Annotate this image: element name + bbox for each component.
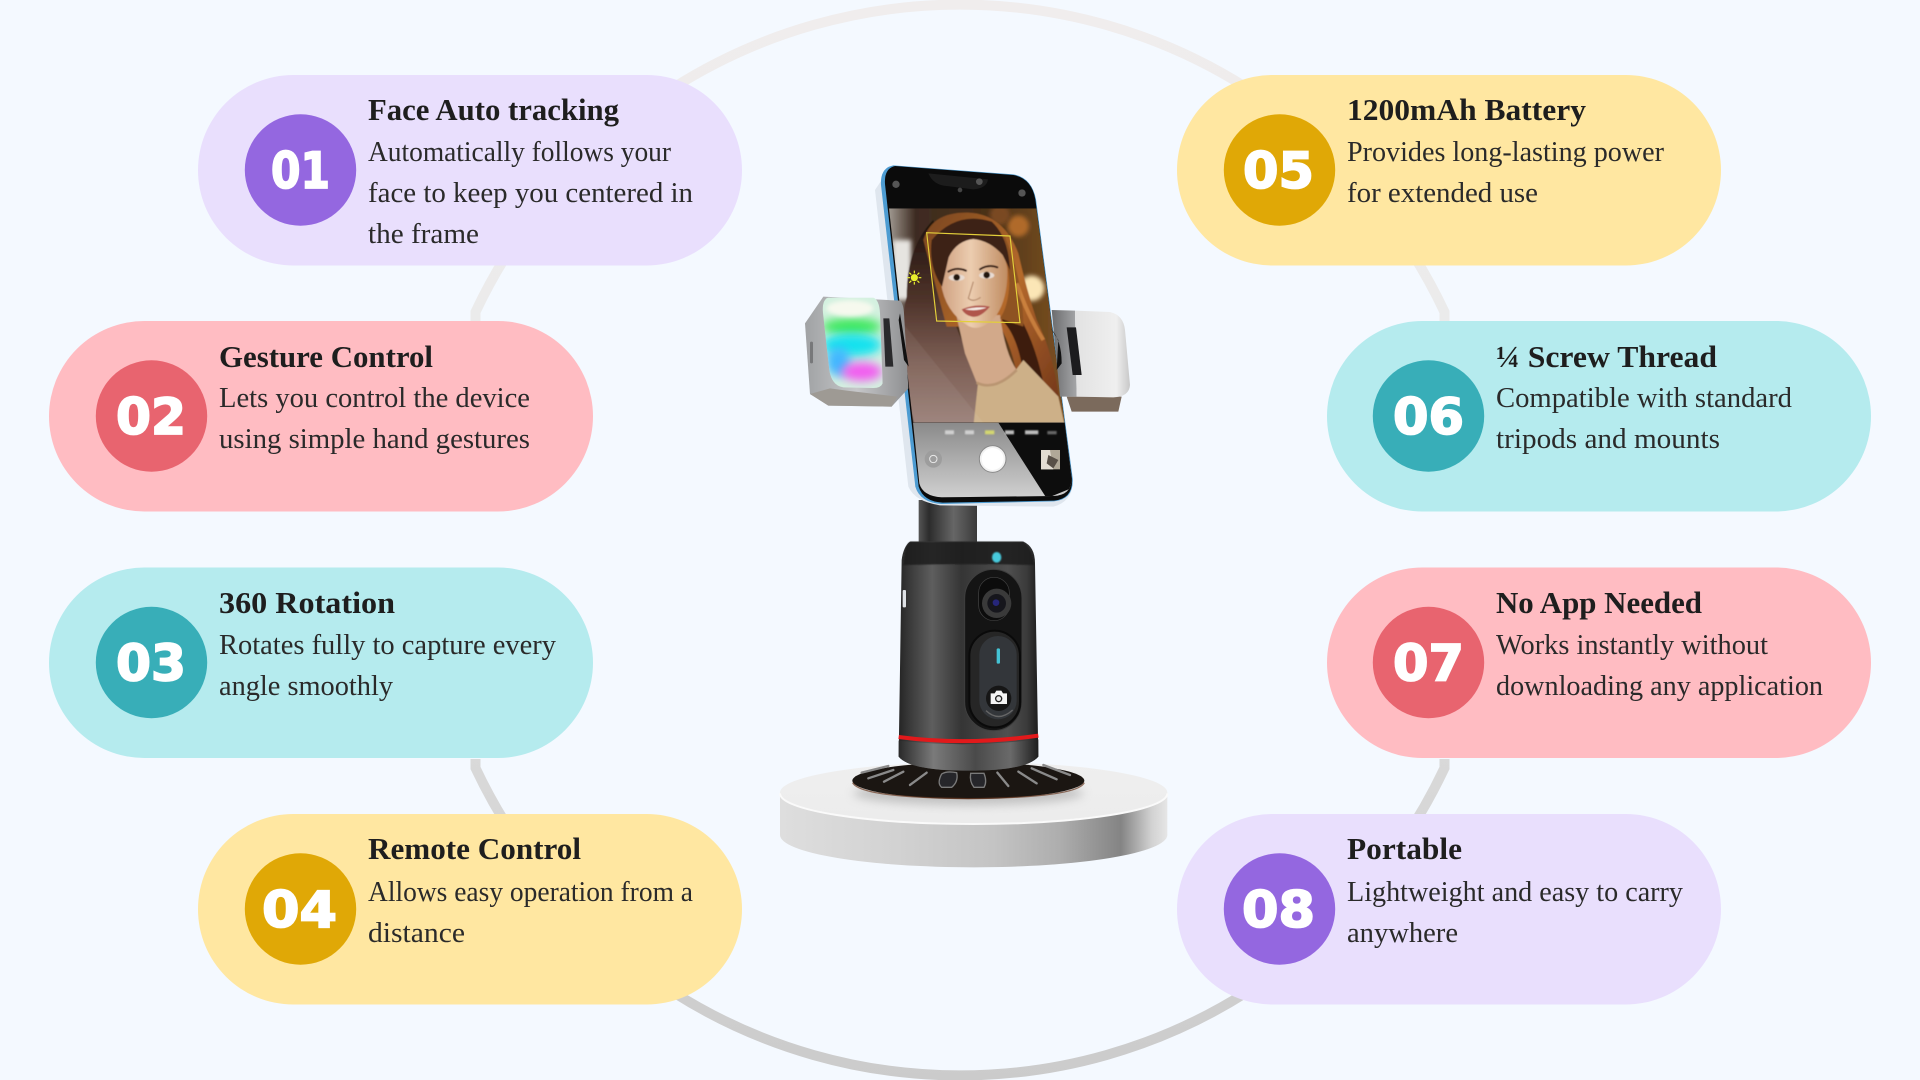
description 01: face to keep you centered in <box>368 177 693 209</box>
right hair highlight <box>1017 283 1043 340</box>
hair framing right <box>1000 236 1024 327</box>
left RGB fill light <box>805 297 909 407</box>
face <box>941 234 1007 328</box>
badge 07 <box>1373 607 1484 718</box>
description 07: downloading any application <box>1496 670 1823 702</box>
badge 04: 04 <box>262 881 337 939</box>
glass reflection <box>905 327 974 422</box>
neckline shadow <box>977 370 1017 385</box>
description 06 <box>1496 382 1792 455</box>
panel: 03 360 Rotation <box>49 568 593 758</box>
badge 03 <box>96 607 207 718</box>
description 03: Rotates fully to capture every <box>219 629 556 661</box>
description 08: Lightweight and easy to carry <box>1347 876 1683 908</box>
description 07: Works instantly without <box>1496 629 1768 661</box>
badge 08 <box>1224 853 1335 965</box>
brows <box>948 266 997 272</box>
gallery thumbnail <box>1041 450 1060 469</box>
description 08 <box>1347 876 1683 949</box>
description 05 <box>1347 136 1664 209</box>
clamp slot <box>883 318 893 367</box>
pill 04 <box>198 814 742 1004</box>
description 04: distance <box>368 917 465 949</box>
pill 08 <box>1177 814 1721 1004</box>
teeth <box>965 307 987 310</box>
description 01 <box>368 136 693 250</box>
badge 03: 03 <box>116 634 186 692</box>
description 06: tripods and mounts <box>1496 423 1720 455</box>
illustration: phone in clamp with lights <box>805 165 1130 507</box>
brightness icon <box>907 271 921 285</box>
USB port <box>810 342 813 363</box>
heading 06: ¼ Screw Thread <box>1496 339 1717 374</box>
description 05: for extended use <box>1347 177 1538 209</box>
panel: 08 Portable <box>1177 814 1721 1004</box>
description 01: the frame <box>368 218 479 250</box>
clamp grip <box>1051 328 1062 370</box>
badge 05: 05 <box>1243 142 1314 200</box>
phone photo: smiling woman <box>887 205 1067 427</box>
description 04 <box>368 876 693 949</box>
badge 05 <box>1224 114 1335 226</box>
description 05: Provides long-lasting power <box>1347 136 1664 168</box>
description 02: Lets you control the device <box>219 382 530 414</box>
clamp slot <box>1067 327 1082 375</box>
description 07 <box>1496 629 1823 702</box>
notch <box>892 173 1026 197</box>
description 01: Automatically follows your <box>368 136 671 168</box>
badge 06 <box>1373 360 1484 472</box>
neck <box>957 315 1017 385</box>
base grip slots <box>862 765 1070 786</box>
pedestal <box>780 762 1167 867</box>
cylinder body <box>899 542 1038 771</box>
forehead hair <box>931 219 1010 287</box>
red ring <box>899 736 1038 741</box>
heading 03: 360 Rotation <box>219 585 395 620</box>
connecting ring: bottom arc <box>476 759 1444 1075</box>
heading 02: Gesture Control <box>219 339 433 374</box>
description 04: Allows easy operation from a <box>368 876 693 908</box>
pill 05 <box>1177 75 1721 266</box>
pill 03 <box>49 568 593 758</box>
stand neck <box>919 500 977 543</box>
camera lens <box>979 577 1011 621</box>
heading 04: Remote Control <box>368 831 581 866</box>
badge 07: 07 <box>1393 634 1464 692</box>
pill 06 <box>1327 321 1871 512</box>
mode labels <box>945 430 1057 434</box>
right hair dark under-layer <box>1002 318 1043 380</box>
connecting ring: top arc <box>476 5 1444 321</box>
heading 05: 1200mAh Battery <box>1347 92 1587 127</box>
camera controls area <box>907 423 1075 498</box>
panel: 02 Gesture Control <box>49 321 593 512</box>
heading 08: Portable <box>1347 831 1462 866</box>
description 03: angle smoothly <box>219 670 393 702</box>
nose <box>968 282 981 300</box>
badge 04 <box>245 853 356 965</box>
badge 02 <box>96 360 207 472</box>
badge 08: 08 <box>1242 881 1315 939</box>
bokeh lights <box>990 205 1044 301</box>
RGB glow <box>822 298 882 388</box>
description 02: using simple hand gestures <box>219 423 530 455</box>
shutter button <box>979 446 1006 472</box>
panel: 04 Remote Control <box>198 814 742 1004</box>
eyes <box>949 272 994 281</box>
pill 01 <box>198 75 742 266</box>
face frame <box>927 233 1020 323</box>
panel: 05 1200mAh Battery <box>1177 75 1721 266</box>
panel: 06 1/4 Screw Thread <box>1327 321 1871 512</box>
pill 07 <box>1327 568 1871 758</box>
right white fill light <box>1051 310 1130 412</box>
panel: 07 No App Needed <box>1327 568 1871 758</box>
top indicator light <box>992 552 1001 563</box>
description 08: anywhere <box>1347 917 1458 949</box>
badge 02: 02 <box>116 388 186 446</box>
bright background area <box>893 240 911 300</box>
pill 02 <box>49 321 593 512</box>
heading 07: No App Needed <box>1496 585 1702 620</box>
panel: 01 Face Auto tracking <box>198 75 742 266</box>
control panel <box>965 569 1022 731</box>
clamp grip <box>899 313 909 367</box>
shirt <box>973 360 1065 427</box>
flip camera icon <box>925 450 942 468</box>
shutter button <box>969 631 1020 727</box>
lips <box>962 305 990 317</box>
back hair <box>922 212 1058 396</box>
badge 06: 06 <box>1393 388 1464 446</box>
badge 01 <box>245 114 356 226</box>
black weighted base <box>852 762 1084 799</box>
heading 01: Face Auto tracking <box>368 92 619 127</box>
description 02 <box>219 382 530 455</box>
description 06: Compatible with standard <box>1496 382 1792 414</box>
description 03 <box>219 629 556 702</box>
badge 01: 01 <box>271 142 330 200</box>
left wavy hair <box>904 220 978 422</box>
phone body <box>875 165 1073 507</box>
illustration: stand and pedestal <box>780 500 1167 867</box>
front grip pads <box>939 772 986 787</box>
